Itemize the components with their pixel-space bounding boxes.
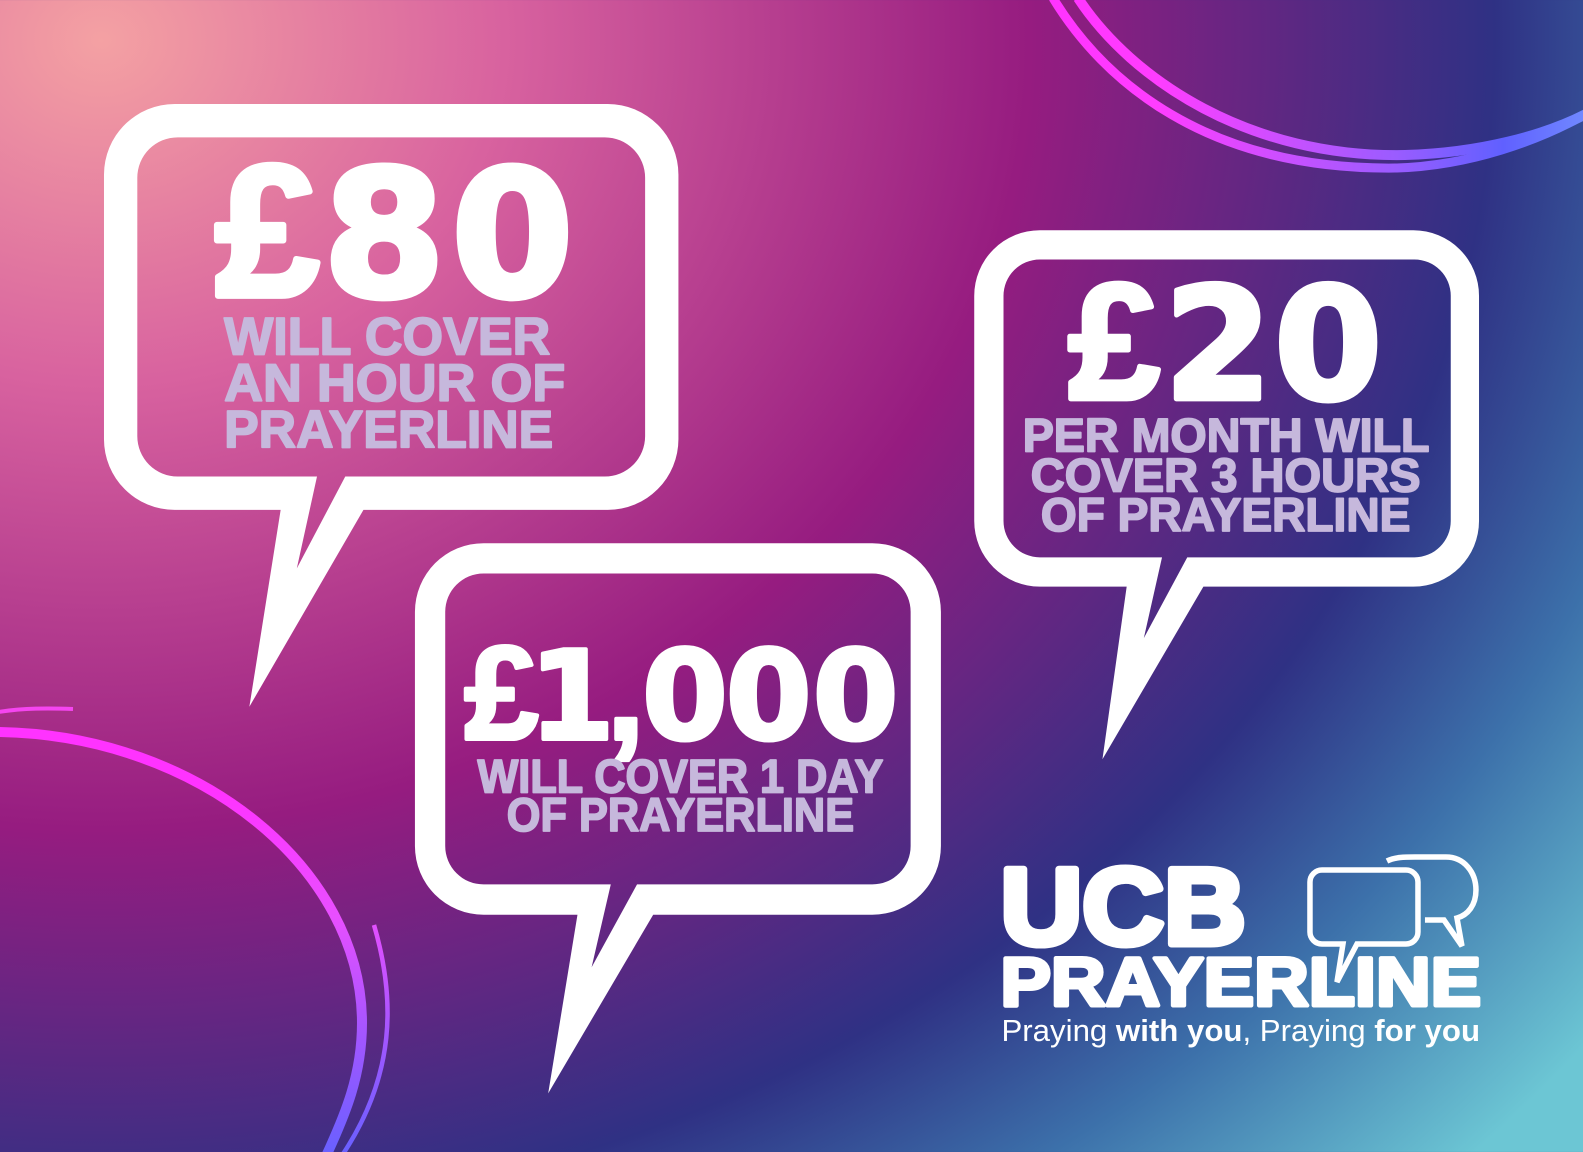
bubble outline — [104, 104, 678, 707]
logo wordmark: UCB: UCB — [1000, 846, 1246, 968]
description: PRAYERLINE — [224, 400, 553, 459]
amount: 2 — [1164, 255, 1272, 436]
decorative arcs: top right — [1053, 0, 1583, 168]
amount: , — [607, 616, 645, 768]
amount: 0 — [642, 626, 728, 769]
description: OF PRAYERLINE — [507, 789, 854, 842]
amount: 8 — [323, 134, 445, 338]
amount: 0 — [813, 626, 898, 769]
amount: 0 — [451, 134, 574, 338]
amount: £ — [1068, 250, 1160, 435]
description: PER MONTH WILL — [1023, 409, 1430, 462]
logo icon: speech bubbles — [1310, 857, 1476, 982]
description: AN HOUR OF — [224, 354, 565, 413]
bubble outline — [974, 230, 1479, 759]
description — [1023, 409, 1430, 542]
description: OF PRAYERLINE — [1041, 489, 1410, 542]
description: WILL COVER — [224, 307, 550, 366]
description: WILL COVER 1 DAY — [478, 751, 883, 804]
amount: 0 — [1274, 255, 1382, 436]
logo tagline: Praying with you, Praying for you — [1001, 1015, 1480, 1048]
speech bubble: £1,000 — [415, 543, 941, 1093]
description — [224, 307, 565, 459]
description — [478, 751, 883, 842]
speech bubble: £20 — [974, 230, 1479, 759]
UCB Prayerline logo — [1000, 846, 1481, 1048]
amount: 0 — [726, 626, 812, 769]
decorative arcs: bottom left — [0, 708, 388, 1152]
description: COVER 3 HOURS — [1031, 450, 1420, 503]
logo wordmark: PRAYERLINE: PRAYERLINE — [1000, 944, 1481, 1021]
amount: £ — [464, 619, 539, 768]
amount: 1 — [529, 626, 615, 769]
bubble outline — [415, 543, 941, 1093]
speech bubble: £80 — [104, 104, 678, 707]
amount: £ — [215, 126, 319, 336]
